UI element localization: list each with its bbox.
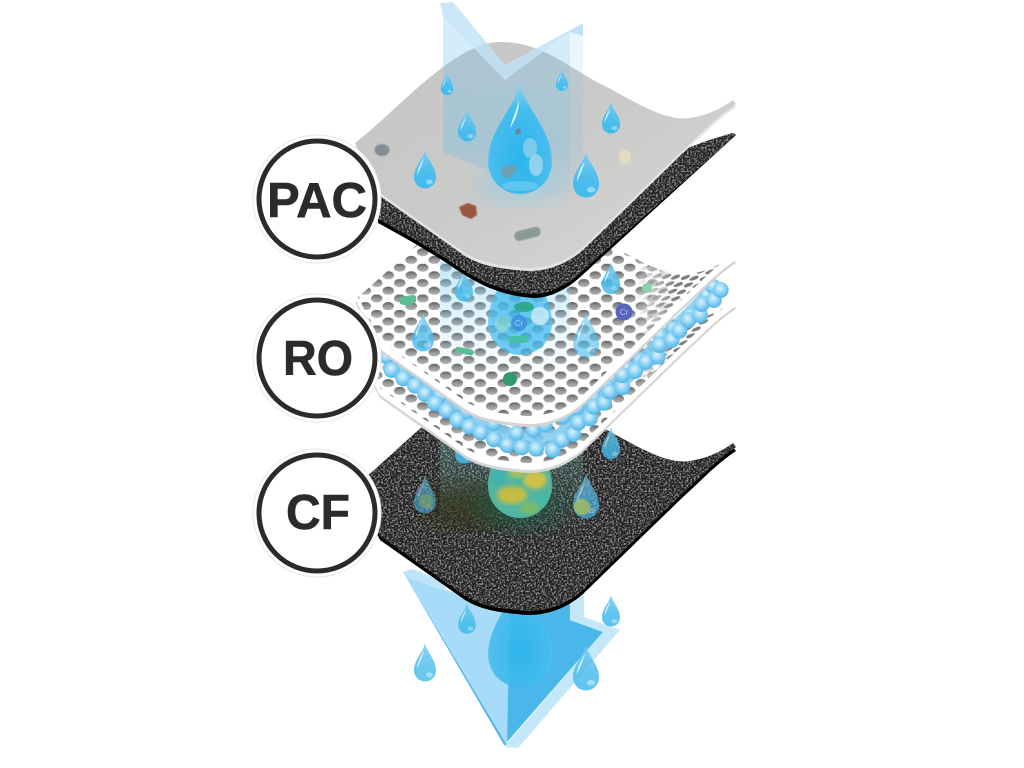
arrow head left rim <box>403 569 446 590</box>
panel: PAC pre-filter layer <box>340 2 740 298</box>
pebbles on the sheet <box>374 144 631 242</box>
glow beneath drop <box>478 165 562 205</box>
blue Cr ion <box>616 304 632 320</box>
filter layer stack illustration <box>252 2 736 748</box>
grey non-woven sheet rim <box>355 45 736 271</box>
panel: RO membrane layer <box>355 244 736 473</box>
badge: PAC <box>253 135 381 263</box>
upper membrane sheet <box>355 244 736 427</box>
large drop with contaminants: Cr <box>515 319 524 328</box>
transparent inflow arrow shaft <box>443 17 570 205</box>
transparent arrow shaft <box>440 262 570 372</box>
large drop with contaminants <box>488 243 552 355</box>
contaminated large drop <box>488 468 552 518</box>
back of inflow arrow band <box>440 2 583 80</box>
arrow left facet <box>406 577 510 745</box>
olive stain <box>424 483 512 527</box>
badge: CF: CF <box>286 486 350 540</box>
carbon backing <box>378 133 736 298</box>
badge: RO: RO <box>283 332 353 386</box>
green particles <box>399 283 652 386</box>
membrane droplets <box>455 270 473 302</box>
carbon sheet surface <box>355 385 736 611</box>
badge: RO <box>253 294 381 422</box>
resin beads, back row <box>379 279 721 441</box>
small water droplets <box>441 73 453 95</box>
transparent arrow shaft <box>440 440 583 514</box>
arrow right facet <box>507 590 603 742</box>
large drop under carbon layer <box>488 575 552 687</box>
contaminated droplets <box>414 475 436 514</box>
panel: CF carbon layer <box>368 427 736 615</box>
blue Cr ion: Cr <box>620 308 629 317</box>
resin beads, front row <box>384 282 729 458</box>
output droplets <box>458 603 476 634</box>
badge: PAC: PAC <box>267 174 367 228</box>
large water drop with trapped particles <box>488 82 552 194</box>
grey non-woven sheet <box>355 42 736 268</box>
lower membrane sheet <box>374 307 736 473</box>
badge: CF <box>253 449 381 577</box>
carbon sheet rim <box>355 389 736 615</box>
arrow right rim <box>504 590 620 748</box>
blue bead channel <box>387 288 717 442</box>
bottom outflow arrow <box>403 569 620 748</box>
